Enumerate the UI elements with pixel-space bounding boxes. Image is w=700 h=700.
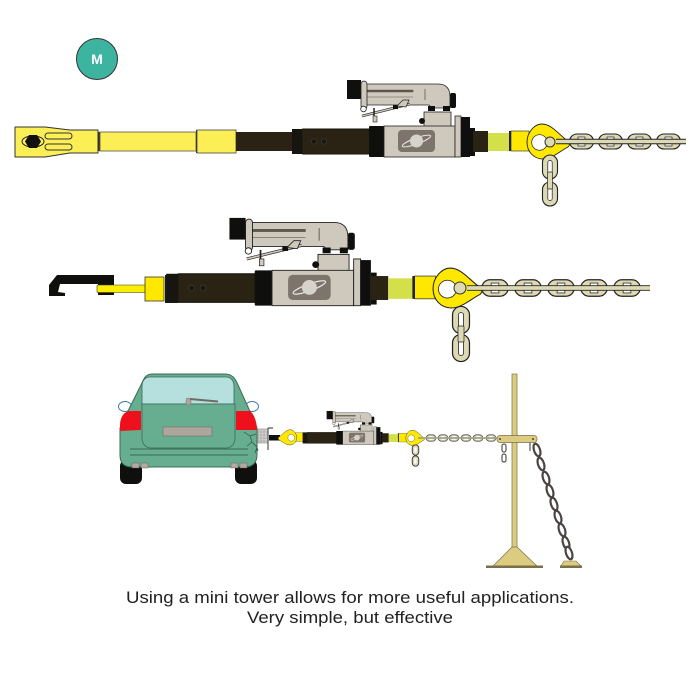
small hanging chain	[502, 444, 506, 462]
black hook	[49, 275, 114, 296]
left eye	[278, 430, 304, 445]
tool 3: tensioner in use	[278, 411, 424, 466]
caption	[126, 588, 574, 627]
pole	[512, 374, 517, 548]
badge: M: M	[91, 51, 103, 67]
hitch plate	[258, 428, 280, 450]
caption: Using a mini tower allows for more useful applications.	[126, 588, 574, 607]
rear window	[142, 377, 234, 404]
tailgate	[142, 404, 235, 448]
number plate	[163, 427, 212, 436]
anchor foot	[560, 561, 582, 568]
badge: M	[76, 38, 118, 80]
tensioner body with handle	[292, 80, 475, 157]
end coupling with eye	[371, 268, 482, 308]
yellow fork end	[15, 127, 98, 157]
bumper lines	[130, 449, 248, 455]
tool 1: extended bar with fork end	[15, 80, 686, 206]
chain to tower	[418, 435, 498, 441]
base	[493, 547, 537, 566]
yellow rod	[97, 285, 146, 292]
hanging chain	[412, 445, 419, 466]
diagonal chain	[532, 443, 574, 560]
end coupling with eye	[382, 430, 424, 445]
horizontal chain	[454, 280, 650, 296]
mini tower	[486, 374, 582, 568]
wiper	[186, 398, 218, 405]
hook on crossbar	[529, 442, 531, 451]
vertical chain	[453, 306, 469, 362]
end coupling with eye	[473, 124, 570, 159]
tool 2: short bar with hook end	[49, 218, 650, 362]
car rear view	[118, 374, 258, 484]
tail lights	[120, 411, 257, 431]
mirrors	[118, 402, 258, 412]
car body	[120, 374, 257, 467]
dark shaft	[236, 132, 293, 151]
body damage cracks	[244, 432, 258, 453]
caption: Very simple, but effective	[247, 608, 453, 627]
yellow extension bar	[98, 130, 236, 153]
dark collar	[165, 275, 178, 303]
tensioner body with handle	[166, 218, 377, 306]
tensioner body with handle	[303, 411, 383, 445]
scene: car, tool and mini tower	[118, 374, 582, 568]
dark shaft	[303, 432, 338, 444]
exhausts	[132, 463, 247, 468]
horizontal chain	[545, 134, 686, 149]
wheels	[120, 460, 257, 484]
vertical chain	[542, 155, 558, 206]
yellow collar	[145, 277, 164, 301]
crossbar	[497, 436, 537, 442]
